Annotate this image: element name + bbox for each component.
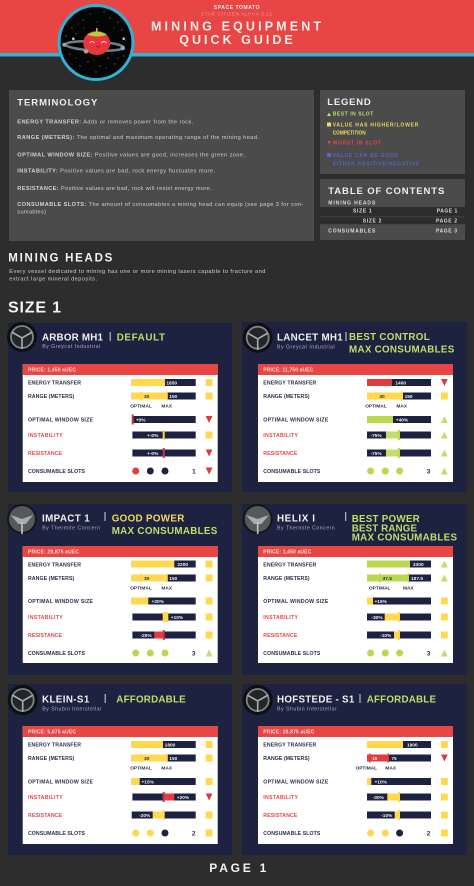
row: consumable slots: 2 <box>427 830 431 838</box>
row: instability <box>28 612 212 622</box>
row: range: MAX <box>161 586 173 592</box>
card title: KLEIN-S1 <box>42 695 90 706</box>
row: range: 150 <box>169 756 178 762</box>
row: energy transfer: ENERGY TRANSFER <box>28 380 81 386</box>
header: version: STAR CITIZEN ALPHA 3.12 <box>201 12 272 18</box>
row: consumable slots <box>28 830 212 838</box>
row: range: OPTIMAL <box>369 586 391 592</box>
term: consumable slots <box>17 202 303 215</box>
row: energy transfer: 1850 <box>166 380 177 386</box>
term: energy transfer: ENERGY TRANSFER: Adds or removes power from the rock. <box>17 119 194 125</box>
row: range: 150 <box>169 394 178 400</box>
row: energy transfer: ENERGY TRANSFER <box>263 380 317 386</box>
row: instability: INSTABILITY <box>28 615 63 621</box>
stats panel <box>23 546 218 663</box>
verdict: BEST POWER <box>352 514 420 525</box>
row: range: OPTIMAL <box>356 766 377 772</box>
row: optimal window: +10% <box>374 780 388 786</box>
manufacturer: By Thermite Concern <box>42 526 100 532</box>
row: instability: -30% <box>373 795 385 801</box>
heading: terminology: TERMINOLOGY <box>17 97 98 108</box>
card: lancet mh1 <box>242 322 467 492</box>
term: consumable slots: sumables) <box>17 209 46 215</box>
row: resistance: -20% <box>139 813 151 819</box>
row: optimal window: OPTIMAL WINDOW SIZE <box>28 418 94 424</box>
verdict: AFFORDABLE <box>367 695 436 706</box>
icon: greycat logo <box>7 322 37 352</box>
manufacturer: By Shubin Interstellar <box>277 706 337 712</box>
row: instability: +20% <box>177 795 190 801</box>
row: consumable slots: 3 <box>427 468 431 476</box>
row: optimal window: +0% <box>136 418 146 424</box>
row: instability: -30% <box>371 615 383 621</box>
row: consumable slots: CONSUMABLE SLOTS <box>28 831 86 837</box>
row: range: 150 <box>169 576 178 582</box>
toc entries: MINING HEADS <box>328 200 376 206</box>
stats panel: PRICE: 28,875 aUEC <box>28 550 79 556</box>
stats panel: PRICE: 1,450 aUEC <box>28 368 76 374</box>
row: range: OPTIMAL <box>130 766 152 772</box>
term: consumable slots: CONSUMABLE SLOTS: The amount of consumables a mining head can equip (see page 3 for con- <box>17 202 303 208</box>
row: optimal window: +30% <box>151 599 165 605</box>
row: energy transfer <box>263 560 448 568</box>
row: energy transfer <box>28 741 212 748</box>
row: range: MAX <box>385 766 397 772</box>
row: consumable slots: 2 <box>192 830 196 838</box>
card: arbor mh1 <box>7 322 232 492</box>
term: range: RANGE (METERS): The optimal and maximum operating range of the mining head. <box>17 135 259 141</box>
row: energy transfer: ENERGY TRANSFER <box>263 562 317 568</box>
verdict: GOOD POWER <box>112 514 184 525</box>
row: resistance: +-0% <box>147 451 159 457</box>
row: range <box>263 574 448 592</box>
row: optimal window <box>263 778 448 786</box>
heading: legend: LEGEND <box>327 97 371 108</box>
row: range: 15 <box>372 756 378 762</box>
row: energy transfer: 2300 <box>413 562 424 568</box>
stats panel <box>23 364 218 482</box>
stats panel: PRICE: 5,075 aUEC <box>28 730 76 736</box>
stats panel <box>258 364 453 482</box>
row: range: RANGE (METERS) <box>28 576 75 582</box>
intro text: Every vessel dedicated to mining has one or more mining lasers capable to fracture and <box>9 269 265 275</box>
verdict: MAX CONSUMABLES <box>349 344 455 355</box>
row: consumable slots <box>28 468 212 476</box>
legend: higher lower competition: VALUE HAS HIGHER/LOWER <box>333 122 419 128</box>
row: instability: -75% <box>370 433 382 439</box>
row: instability: INSTABILITY <box>263 795 299 801</box>
row: instability: INSTABILITY <box>263 615 299 621</box>
row: optimal window: OPTIMAL WINDOW SIZE <box>263 599 329 605</box>
row: instability <box>263 792 448 802</box>
verdict: BEST CONTROL <box>349 332 430 343</box>
card title: IMPACT 1 <box>42 514 90 525</box>
row: optimal window: +40% <box>396 418 409 424</box>
row: range: 187.5 <box>411 576 423 582</box>
row: instability <box>263 430 448 440</box>
panel: terminology <box>9 90 314 241</box>
row: resistance <box>263 810 448 820</box>
row: range: RANGE (METERS) <box>263 576 310 582</box>
row: optimal window: +15% <box>374 599 388 605</box>
card title: ARBOR MH1 <box>42 333 104 344</box>
row: energy transfer: 2200 <box>177 562 188 568</box>
row: consumable slots: 3 <box>427 650 431 658</box>
row: optimal window: OPTIMAL WINDOW SIZE <box>28 780 94 786</box>
legend: best in slot: BEST IN SLOT <box>333 112 373 118</box>
row: optimal window <box>263 416 448 424</box>
row: range: MAX <box>403 586 414 592</box>
intro text: extract large mineral deposits. <box>9 277 97 283</box>
row: resistance: -25% <box>140 633 152 639</box>
row: range: OPTIMAL <box>130 586 152 592</box>
row: range: RANGE (METERS) <box>28 394 75 400</box>
card: impact 1 <box>7 504 232 675</box>
verdict: BEST RANGE <box>352 523 417 534</box>
manufacturer: By Shubin Interstellar <box>42 706 102 712</box>
card title: LANCET MH1 <box>277 332 343 343</box>
row: consumable slots: CONSUMABLE SLOTS <box>263 651 321 657</box>
row: resistance <box>263 630 448 640</box>
legend: value can be good: VALUE CAN BE GOOD <box>333 153 398 159</box>
verdict <box>104 512 218 537</box>
row: instability: INSTABILITY <box>28 433 63 439</box>
row: range: 150 <box>405 394 413 400</box>
row: range <box>263 392 448 410</box>
row: instability: +-0% <box>147 433 159 439</box>
toc entries: PAGE 3 <box>436 229 457 235</box>
term: optimal window: OPTIMAL WINDOW SIZE: Positive values are good, increases the green zone. <box>17 153 245 159</box>
row: optimal window <box>28 414 212 424</box>
verdict <box>346 332 455 355</box>
row: range: RANGE (METERS) <box>263 394 310 400</box>
row: range: 30 <box>144 756 150 762</box>
row: consumable slots: 3 <box>192 650 196 658</box>
manufacturer: By Thermite Concern <box>277 526 335 532</box>
stats panel: PRICE: 28,875 aUEC <box>263 730 315 736</box>
row: instability <box>263 612 448 622</box>
title: MINING EQUIPMENT <box>151 19 321 33</box>
header banner <box>0 0 474 56</box>
legend: value can be good <box>327 153 420 167</box>
row: consumable slots: CONSUMABLE SLOTS <box>28 469 86 475</box>
legend: worst in slot: WORST IN SLOT <box>333 141 381 147</box>
row: range: RANGE (METERS) <box>28 756 75 762</box>
toc entries: CONSUMABLES <box>328 229 376 235</box>
verdict: AFFORDABLE <box>116 695 186 706</box>
row: energy transfer: 1800 <box>165 742 176 748</box>
row: resistance: RESISTANCE <box>28 633 63 639</box>
row: energy transfer <box>28 560 212 568</box>
row: energy transfer: 1900 <box>407 742 418 748</box>
row: resistance: RESISTANCE <box>263 633 298 639</box>
legend: higher lower competition <box>327 122 419 136</box>
row: range: 30 <box>144 576 150 582</box>
row: range <box>28 754 212 772</box>
row: range: 30 <box>144 394 150 400</box>
row: range <box>28 392 212 410</box>
logo: space tomato <box>59 6 133 80</box>
row: range: OPTIMAL <box>365 404 387 410</box>
row: consumable slots: CONSUMABLE SLOTS <box>263 831 321 837</box>
card title: HELIX I <box>277 514 315 525</box>
row: consumable slots: CONSUMABLE SLOTS <box>263 469 321 475</box>
row: optimal window <box>28 598 212 605</box>
verdict: MAX CONSUMABLES <box>352 533 457 544</box>
stats panel <box>258 726 453 844</box>
row: range: RANGE (METERS) <box>263 756 310 762</box>
row: resistance: RESISTANCE <box>28 813 63 819</box>
manufacturer: By Greycat Industrial <box>277 344 335 350</box>
title: QUICK GUIDE <box>179 33 293 47</box>
header: author: SPACE TOMATO <box>214 5 260 11</box>
row: energy transfer <box>263 741 448 748</box>
row: resistance: RESISTANCE <box>28 451 63 457</box>
row: range: MAX <box>396 404 408 410</box>
card: klein-s1 <box>8 684 232 855</box>
title <box>151 19 321 47</box>
row: energy transfer <box>28 379 212 386</box>
row: instability: INSTABILITY <box>28 795 63 801</box>
legend: value can be good: EITHER POSITIVE/NEGATIVE <box>333 161 420 167</box>
card title: HOFSTEDE - S1 <box>277 695 355 706</box>
row: optimal window <box>263 598 448 605</box>
stats panel <box>258 546 453 663</box>
row: consumable slots <box>263 830 448 838</box>
icon: shubin logo <box>243 685 273 715</box>
row: energy transfer: 1400 <box>395 380 406 386</box>
card: hofstede - s1 <box>242 684 467 855</box>
row: range: MAX <box>161 404 173 410</box>
heading: size 1: SIZE 1 <box>8 300 61 317</box>
row: instability <box>28 430 212 440</box>
row: resistance <box>28 448 212 458</box>
row: consumable slots: CONSUMABLE SLOTS <box>28 651 86 657</box>
icon: greycat logo <box>243 323 273 353</box>
verdict: DEFAULT <box>117 333 165 344</box>
footer: page number: PAGE 1 <box>209 861 267 875</box>
row: energy transfer <box>263 379 448 386</box>
term: instability: INSTABILITY: Positive values are bad, rock energy fluctuates more. <box>17 169 215 175</box>
row: optimal window: OPTIMAL WINDOW SIZE <box>28 599 94 605</box>
stats panel: PRICE: 1,450 aUEC <box>263 550 312 556</box>
row: range <box>28 574 212 592</box>
verdict: MAX CONSUMABLES <box>112 526 218 537</box>
verdict <box>345 512 457 544</box>
row: resistance: -10% <box>380 633 392 639</box>
row: range: 75 <box>391 756 397 762</box>
row: instability: +10% <box>171 615 184 621</box>
heading: mining heads: MINING HEADS <box>8 252 113 264</box>
panel: legend <box>320 90 465 174</box>
row: optimal window: OPTIMAL WINDOW SIZE <box>263 418 329 424</box>
toc entries: PAGE 1 <box>437 209 458 215</box>
heading: table of contents: TABLE OF CONTENTS <box>328 186 444 197</box>
panel: table of contents <box>320 179 465 240</box>
row: range: OPTIMAL <box>130 404 152 410</box>
row: instability <box>28 792 212 802</box>
toc entries: SIZE 1 <box>353 209 372 215</box>
row: consumable slots <box>263 650 448 658</box>
row: energy transfer: ENERGY TRANSFER <box>28 562 81 568</box>
toc entries <box>328 200 458 235</box>
row: consumable slots <box>28 650 212 658</box>
stats panel <box>23 726 218 844</box>
term: resistance: RESISTANCE: Positive values are bad, rock will resist energy more. <box>17 186 212 192</box>
row: optimal window: +15% <box>141 780 155 786</box>
row: resistance <box>28 630 212 640</box>
intro text <box>9 269 265 283</box>
row: optimal window <box>28 778 212 786</box>
icon: shubin logo <box>8 685 38 715</box>
row: energy transfer: ENERGY TRANSFER <box>28 742 81 748</box>
row: resistance: -10% <box>381 813 393 819</box>
row: instability: INSTABILITY <box>263 433 299 439</box>
row: consumable slots <box>263 468 448 476</box>
card: helix i <box>242 504 467 675</box>
manufacturer: By Greycat Industrial <box>42 344 100 350</box>
row: consumable slots: 1 <box>192 468 196 476</box>
row: resistance <box>28 810 212 820</box>
icon: thermite logo <box>7 504 37 534</box>
row: resistance: RESISTANCE <box>263 451 298 457</box>
row: resistance <box>263 448 448 458</box>
toc entries: PAGE 2 <box>436 218 457 224</box>
legend: higher lower competition: COMPETITION <box>333 130 366 136</box>
row: resistance: RESISTANCE <box>263 813 298 819</box>
icon: thermite logo <box>243 504 273 534</box>
row: range: MAX <box>161 766 173 772</box>
row: range: 37.5 <box>383 576 392 582</box>
row: range: 30 <box>379 394 385 400</box>
stats panel: PRICE: 11,750 aUEC <box>263 368 314 374</box>
toc entries: SIZE 2 <box>363 218 382 224</box>
row: energy transfer: ENERGY TRANSFER <box>263 742 317 748</box>
row: optimal window: OPTIMAL WINDOW SIZE <box>263 780 329 786</box>
row: range <box>263 754 448 772</box>
row: resistance: -75% <box>370 451 382 457</box>
